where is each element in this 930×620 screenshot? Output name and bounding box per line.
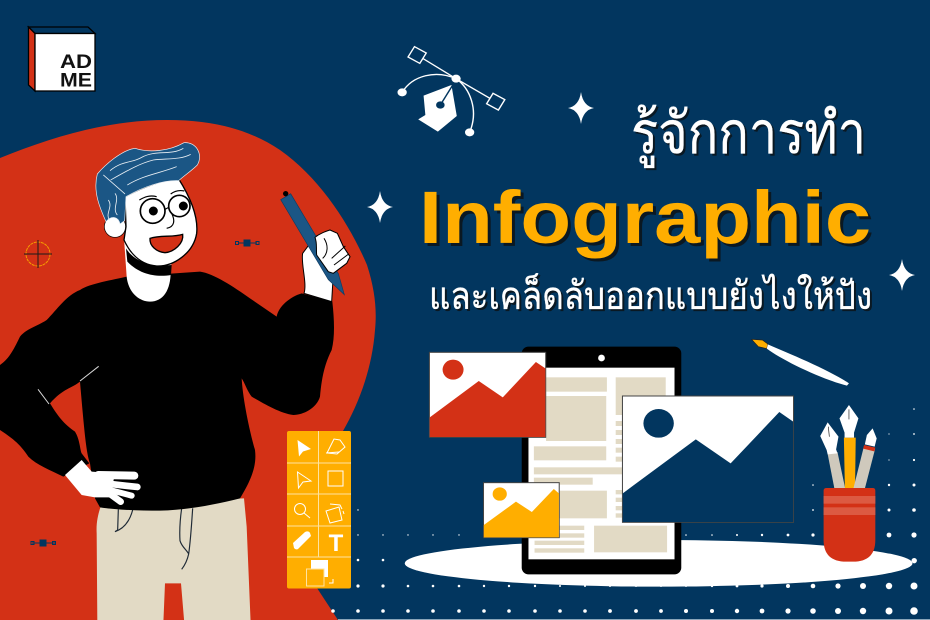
icon: anchor handle bottom [31,540,56,546]
cup [824,488,875,562]
title line 2: Infographic [419,176,871,259]
tablet [522,347,681,574]
character: man holding pen [0,143,350,620]
hair highlights [103,148,191,220]
tool: paint bucket [326,504,344,523]
sparkles [367,92,915,291]
image card yellow [484,483,559,538]
ear [104,216,126,237]
trousers [97,498,251,620]
raised hand palm [302,230,350,302]
toolbar panel [287,431,351,588]
sweater [0,272,334,511]
icon: anchor handle top [236,240,259,246]
tool: colour swatches [306,560,333,586]
title line 1: รู้จักการทำ [631,101,866,168]
image card red [429,352,546,437]
illustration: tablet on table [405,339,917,587]
right edge dot [911,558,917,563]
tool: zoom [294,504,310,518]
tool: rectangle [328,471,343,486]
icon: pen tool with bezier handles [397,47,505,136]
table ellipse [405,540,913,587]
tool: eraser [293,531,311,549]
glasses and eyes [139,191,190,228]
neck [124,238,172,302]
logo: ADME [28,27,95,92]
tool: pen [326,439,345,454]
dot grid [331,408,918,615]
hair [96,143,200,224]
pen [281,191,344,295]
logo: ADME: ME [60,70,92,92]
lower hand [65,460,137,502]
image card navy [622,396,794,522]
tool: direct selection [298,472,311,488]
raised hand fingers [315,230,350,273]
tool: selection arrow [298,440,311,456]
mouth [150,234,183,253]
face [124,178,197,266]
tool: type: T [329,530,344,557]
icon: target crosshair [24,240,52,268]
red background blob [0,120,376,620]
logo: ADME: AD [60,52,92,73]
pens in cup [820,405,877,489]
paint brush [752,339,849,386]
neck shadow [126,248,172,276]
